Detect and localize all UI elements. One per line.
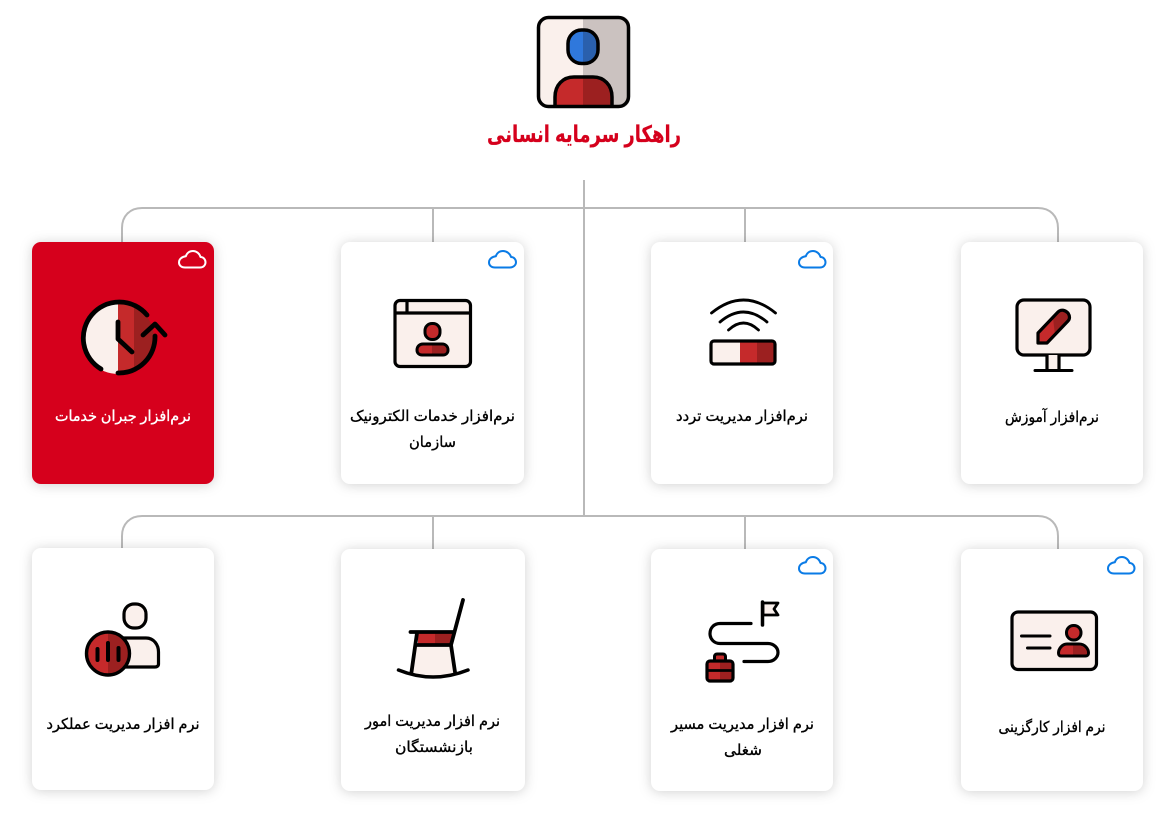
icon: person with chart bbox=[86, 604, 158, 675]
icon: cloud blue bbox=[799, 557, 826, 574]
icon: human capital person bbox=[537, 16, 630, 109]
title: راهکار سرمایه انسانی bbox=[487, 121, 681, 148]
panel: training software bbox=[961, 242, 1143, 484]
icon: monitor with pencil bbox=[1017, 300, 1090, 370]
connector lines bbox=[122, 180, 1058, 549]
label: نرم‌افزار مدیریت تردد bbox=[676, 408, 808, 425]
icon: ID card bbox=[1012, 612, 1096, 670]
label: نرم افزار مدیریت مسیر bbox=[670, 716, 814, 733]
label line 2: سازمان bbox=[409, 434, 456, 451]
icon: wireless device bbox=[710, 300, 776, 365]
panel: e-services software bbox=[341, 242, 524, 484]
label: نرم‌افزار خدمات الکترونیک bbox=[350, 408, 515, 425]
icon: browser with person bbox=[395, 300, 470, 366]
panel: compensation software bbox=[32, 242, 214, 484]
label: نرم افزار کارگزینی bbox=[998, 718, 1106, 736]
label line 2: بازنشستگان bbox=[395, 738, 473, 756]
icon: cloud blue bbox=[799, 251, 826, 268]
panel: performance software bbox=[32, 548, 214, 790]
label line 2: شغلی bbox=[724, 742, 762, 759]
panel: attendance software bbox=[651, 242, 833, 484]
label: نرم افزار مدیریت امور bbox=[364, 713, 500, 730]
icon: cloud blue bbox=[489, 251, 516, 268]
icon: flag path and briefcase bbox=[705, 602, 778, 682]
icon: rocking chair bbox=[398, 600, 468, 677]
panel: career path software bbox=[651, 549, 833, 791]
label: نرم افزار مدیریت عملکرد bbox=[46, 716, 200, 733]
panel: retirement software bbox=[341, 549, 525, 791]
label: نرم‌افزار جبران خدمات bbox=[55, 408, 191, 425]
icon: cloud blue bbox=[1108, 557, 1134, 574]
panel: recruitment software bbox=[961, 549, 1143, 791]
icon: cloud white bbox=[179, 251, 206, 268]
icon: clock with arrow bbox=[80, 300, 165, 376]
label: نرم‌افزار آموزش bbox=[1005, 408, 1099, 426]
